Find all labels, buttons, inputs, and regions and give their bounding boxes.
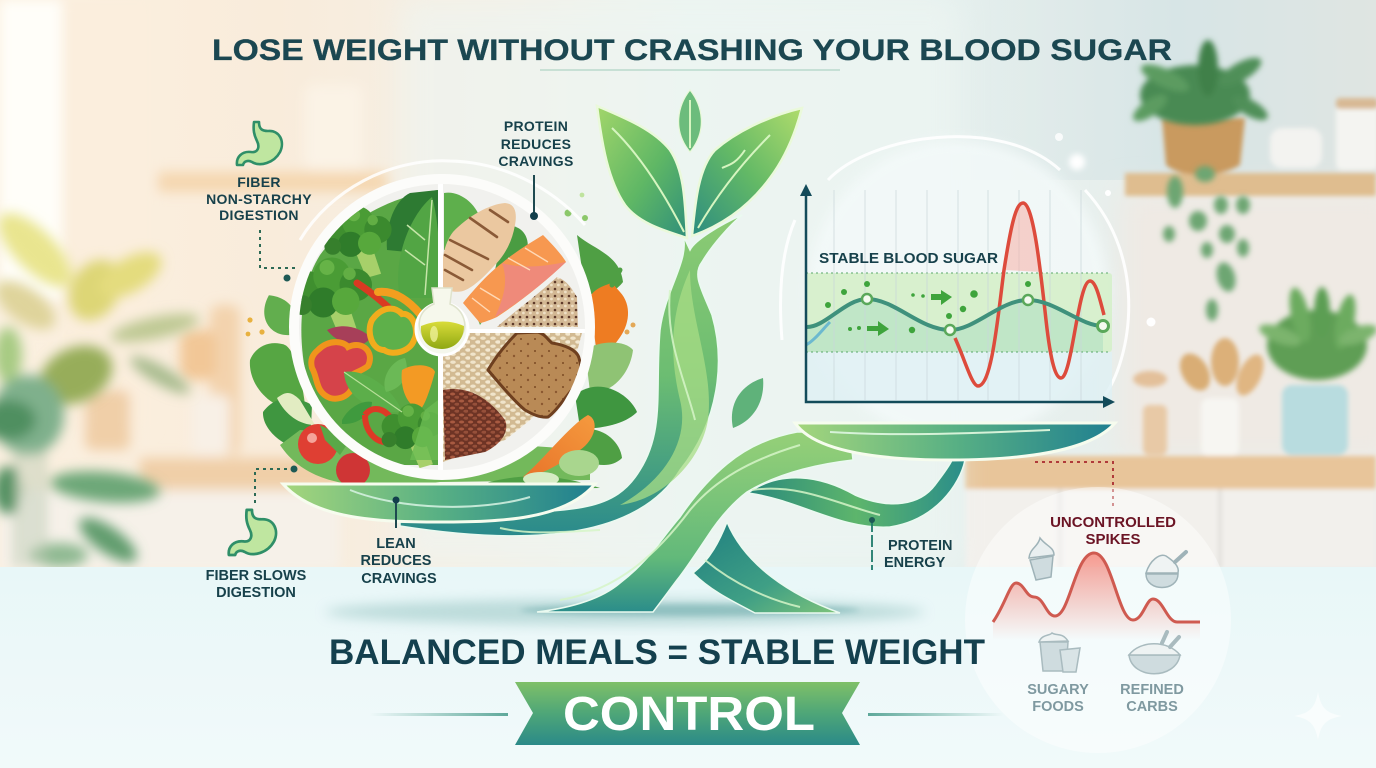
garnish around plate (246, 193, 637, 490)
stem veins (500, 290, 880, 607)
title divider (540, 69, 840, 71)
axes (806, 192, 1108, 402)
label: protein reduces cravings: REDUCES (501, 136, 571, 152)
label: protein reduces cravings: CRAVINGS (498, 153, 574, 169)
stem: left foot to right tray (537, 432, 853, 612)
leaf: small right (732, 378, 763, 428)
label: lean reduces cravings: CRAVINGS (361, 571, 437, 587)
icon: refined carbs bowl (1129, 632, 1180, 674)
stem: right foot (693, 522, 840, 613)
red line (955, 203, 1104, 386)
label: fiber non-starchy digestion (206, 122, 312, 282)
icon: milkshake (1029, 538, 1054, 580)
headline: balanced meals: BALANCED MEALS = STABLE WEIGHT (329, 633, 985, 672)
chart label: STABLE BLOOD SUGAR (819, 251, 999, 267)
label: protein reduces cravings (498, 118, 574, 220)
spike curve (993, 553, 1200, 640)
protein quarter (442, 193, 578, 327)
icon: sugary foods (1039, 633, 1080, 672)
vegetables half (292, 190, 442, 468)
label: protein energy: PROTEIN (888, 538, 952, 554)
right tray (795, 423, 1115, 460)
stem: inner ribbon (620, 270, 709, 505)
leaf: left (597, 106, 687, 238)
grains quarter (443, 332, 582, 462)
red spike area (1004, 203, 1042, 272)
label: sugary foods: SUGARY (1027, 682, 1089, 698)
icon: stomach (229, 510, 276, 555)
floor band (0, 567, 1376, 768)
plant: central stem with leaves (325, 90, 965, 625)
label: protein energy: ENERGY (884, 555, 946, 571)
icon: flour scoop (1146, 552, 1186, 588)
label: lean reduces cravings (361, 496, 437, 587)
label: fiber non-starchy digestion: FIBER (237, 174, 281, 190)
label: sugary foods: FOODS (1032, 699, 1084, 715)
label: lean reduces cravings: REDUCES (361, 553, 432, 569)
oil flask (416, 288, 468, 355)
stem: main stalk to left tray (400, 215, 742, 536)
banner: control (370, 682, 1003, 745)
label: refined carbs: CARBS (1126, 699, 1178, 715)
banner: control: CONTROL (563, 688, 815, 741)
green line (806, 299, 1103, 330)
label: fiber slows digestion (206, 466, 307, 601)
label: lean reduces cravings: LEAN (376, 536, 416, 552)
sparkle (1294, 692, 1342, 740)
label: fiber slows digestion: FIBER SLOWS (206, 568, 307, 584)
label: fiber non-starchy digestion: NON-STARCHY (206, 191, 312, 207)
chart: blood sugar (781, 133, 1156, 440)
label: fiber slows digestion: DIGESTION (216, 585, 296, 601)
icon: stomach (237, 122, 282, 165)
plate: balanced meal (246, 161, 637, 490)
label: protein energy (869, 517, 952, 571)
background: blurred kitchen (0, 0, 1376, 570)
dashed connector to spikes (1035, 462, 1113, 506)
dots and arrows (825, 281, 1031, 336)
label: refined carbs: REFINED (1120, 682, 1184, 698)
panel: uncontrolled spikes (965, 487, 1231, 753)
label: fiber non-starchy digestion: DIGESTION (219, 207, 299, 223)
spike heading: UNCONTROLLED (1050, 514, 1176, 531)
stem: lower right branch (748, 460, 965, 527)
left tray (283, 484, 595, 522)
title: LOSE WEIGHT WITHOUT CRASHING YOUR BLOOD SUGAR (212, 34, 1172, 67)
spike heading: SPIKES (1085, 531, 1141, 548)
label: protein reduces cravings: PROTEIN (504, 118, 568, 134)
leaf: right (692, 108, 802, 236)
target band (806, 273, 1112, 352)
leaf: top (679, 90, 701, 152)
